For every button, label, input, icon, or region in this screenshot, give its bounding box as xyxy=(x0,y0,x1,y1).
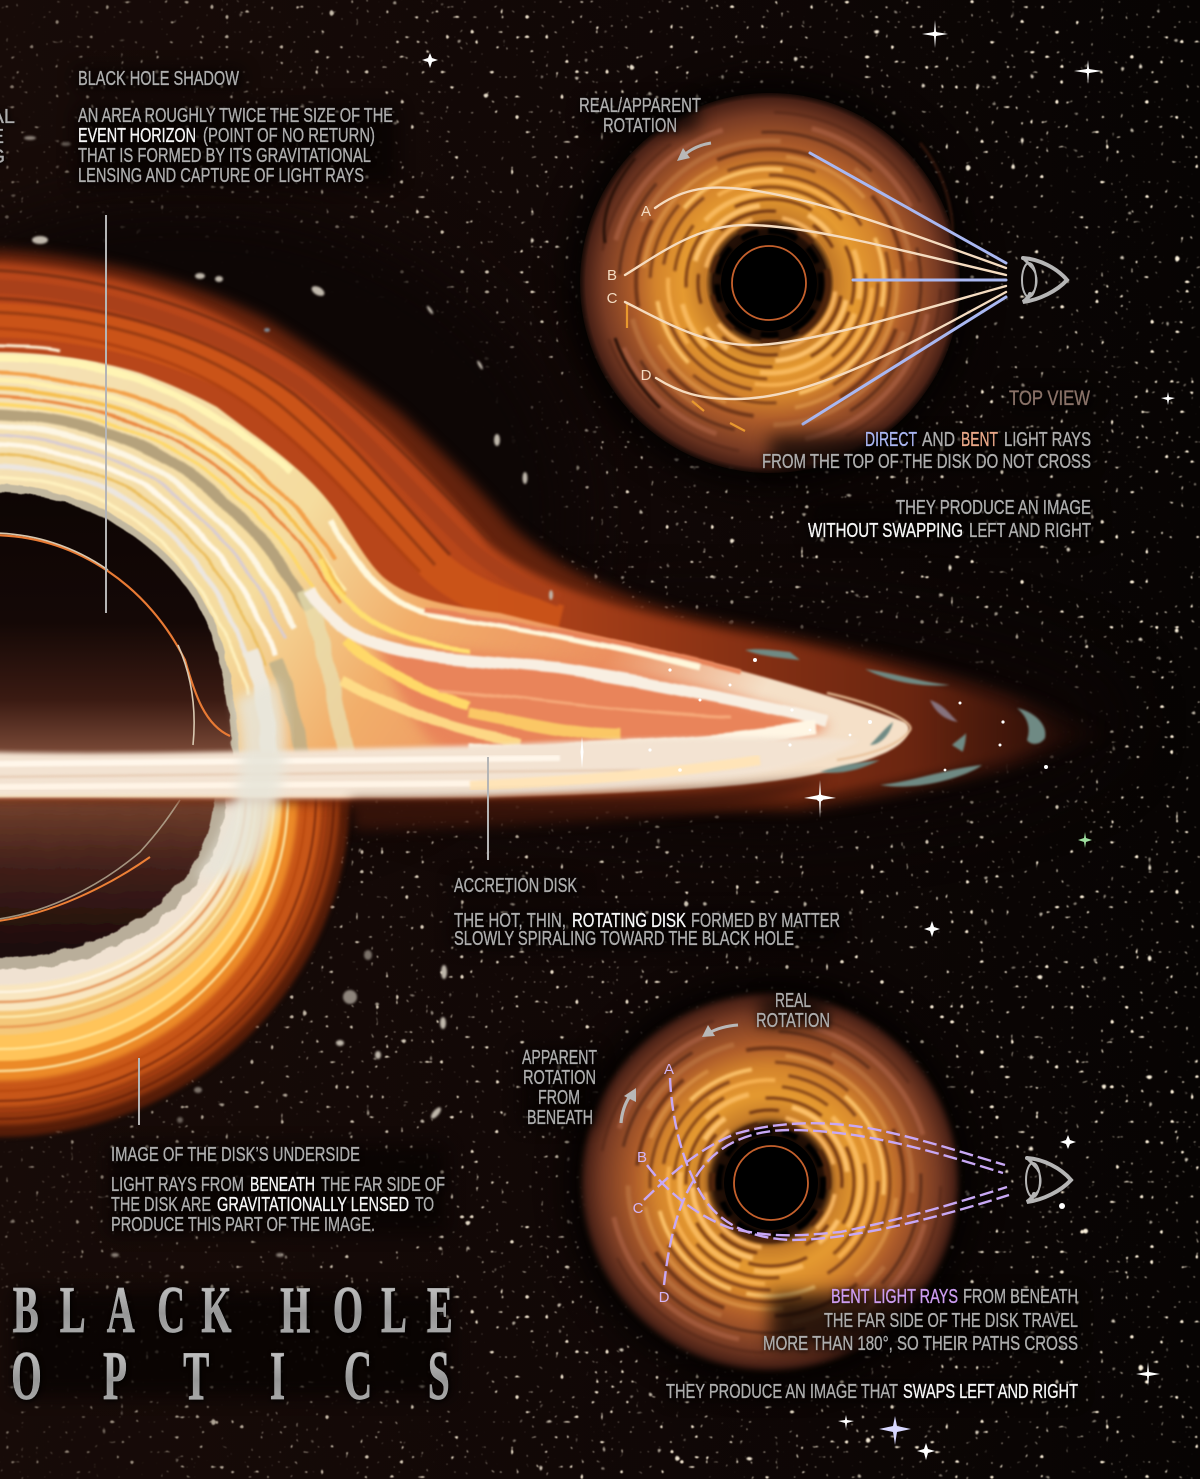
text: disk underside: GRAVITATIONALLY LENSED xyxy=(217,1194,409,1216)
bottom ray labels: D xyxy=(659,1289,670,1306)
text: real/apparent rotation: REAL/APPARENT xyxy=(579,95,701,117)
rotation arrow xyxy=(677,143,711,161)
text: black hole shadow xyxy=(0,68,393,187)
text: apparent rotation from beneath: FROM xyxy=(538,1087,580,1109)
bent light rays xyxy=(625,188,1006,399)
text: apparent rotation from beneath: APPARENT xyxy=(522,1047,597,1069)
bright core shape xyxy=(0,352,909,797)
bottom ray labels: B xyxy=(637,1149,647,1166)
text: black hole shadow: (POINT OF NO RETURN) xyxy=(203,125,375,147)
bright flare stars xyxy=(422,20,1175,1460)
text: top view: THEY PRODUCE AN IMAGE xyxy=(896,497,1091,519)
text: bent light rays xyxy=(666,1286,1078,1403)
lower lensed disk xyxy=(0,453,350,1137)
text: accretion disk: ROTATING DISK xyxy=(572,910,686,932)
text: disk underside xyxy=(111,1144,445,1236)
bottom ray labels: C xyxy=(633,1200,644,1217)
text: top view: FROM THE TOP OF THE DISK DO NOT CROSS xyxy=(762,451,1091,473)
text: apparent rotation from beneath: BENEATH xyxy=(527,1107,593,1129)
top ray labels: D xyxy=(641,367,652,384)
bottom disk body xyxy=(551,963,989,1401)
top ray labels: C xyxy=(607,290,618,307)
apparent rotation arrow xyxy=(621,1088,636,1123)
icon: eye xyxy=(1026,1158,1071,1202)
ring crossing band xyxy=(195,680,285,880)
text: accretion disk: ACCRETION DISK xyxy=(454,875,577,897)
dust streak motes xyxy=(24,136,553,1257)
text: top view: LIGHT RAYS xyxy=(1004,429,1091,451)
icon: eye xyxy=(1022,258,1067,302)
bottom ray labels: A xyxy=(664,1061,674,1078)
teal disk fragments xyxy=(745,649,1045,787)
text: bent light rays: SWAPS LEFT AND RIGHT xyxy=(903,1381,1078,1403)
stars over disk tip xyxy=(580,658,1048,772)
title: OPTICS xyxy=(11,1337,450,1415)
text: top view: LEFT AND RIGHT xyxy=(969,520,1091,542)
photon ring lower xyxy=(0,857,150,922)
text: disk underside: TO xyxy=(415,1194,434,1216)
text: disk underside: PRODUCE THIS PART OF THE IMAGE. xyxy=(111,1214,375,1236)
text: top view: DIRECT xyxy=(865,429,917,451)
text: bent light rays: THE FAR SIDE OF THE DISK TRAVEL xyxy=(824,1310,1078,1332)
upper shadow hole xyxy=(0,490,234,760)
flowing streaks xyxy=(0,346,826,782)
main black hole illustration xyxy=(0,136,1105,1257)
text: top view xyxy=(762,387,1091,542)
text: black hole shadow: LENSING AND CAPTURE OF LIGHT RAYS xyxy=(78,165,364,187)
text: accretion disk: THE HOT, THIN, xyxy=(454,910,566,932)
pointer line: shadow xyxy=(105,215,107,613)
text: disk underside: THE DISK ARE xyxy=(111,1194,211,1216)
top black hole core xyxy=(717,231,821,335)
title xyxy=(11,1272,453,1415)
text: accretion disk: SLOWLY SPIRALING TOWARD THE BLACK HOLE xyxy=(454,928,794,950)
text: top view: WITHOUT SWAPPING xyxy=(808,520,963,542)
upper disk outer orange xyxy=(0,262,1075,797)
upper disk orange gradient streaks xyxy=(0,270,560,622)
text: apparent rotation from beneath: ROTATION xyxy=(523,1067,596,1089)
top view disk diagram xyxy=(551,64,1067,502)
photon ring upper xyxy=(0,535,230,736)
bright edge arc at disk tip xyxy=(827,693,910,760)
horizontal bright band xyxy=(0,738,860,798)
bottom black hole core xyxy=(719,1131,823,1235)
title: BLACKHOLE xyxy=(13,1272,453,1347)
text: real rotation: REAL xyxy=(775,990,811,1012)
text: real/apparent rotation: ROTATION xyxy=(603,115,677,137)
text: apparent rotation from beneath xyxy=(522,1047,597,1129)
shadow rim xyxy=(0,488,236,760)
text: disk underside: THE FAR SIDE OF xyxy=(321,1174,445,1196)
text: bent light rays: MORE THAN 180°, SO THEIR PATHS CROSS xyxy=(763,1333,1078,1355)
bottom ray labels xyxy=(633,1061,674,1306)
text: disk underside: LIGHT RAYS FROM xyxy=(111,1174,244,1196)
lower disk edge shade xyxy=(350,778,830,830)
text: real rotation: ROTATION xyxy=(756,1010,830,1032)
upper disk dim red fringe xyxy=(0,250,1105,810)
pointer line: accretion disk xyxy=(487,757,489,860)
text: top view: TOP VIEW xyxy=(1009,387,1090,410)
top ray labels xyxy=(607,203,652,384)
salmon inner disk xyxy=(375,640,830,779)
bottom view disk diagram xyxy=(551,963,1071,1401)
text: disk underside: IMAGE OF THE DISK’S UNDERSIDE xyxy=(111,1144,360,1166)
text: black hole shadow: THAT IS FORMED BY ITS GRAVITATIONAL xyxy=(78,145,371,167)
pointer line: underside xyxy=(138,1058,140,1125)
text: disk underside: BENEATH xyxy=(250,1174,315,1196)
top disk body xyxy=(551,64,989,502)
text: black hole shadow: AN AREA ROUGHLY TWICE THE SIZE OF THE xyxy=(78,105,393,127)
text: accretion disk: FORMED BY MATTER xyxy=(691,910,840,932)
text: bent light rays: BENT LIGHT RAYS xyxy=(831,1286,958,1308)
text: top view: AND xyxy=(922,429,955,451)
dashed purple light rays xyxy=(644,1078,1009,1285)
real rotation arrow xyxy=(702,1025,738,1037)
text: real/apparent rotation xyxy=(579,95,701,137)
text: bent light rays: FROM BENEATH xyxy=(963,1286,1078,1308)
text: bent light rays: THEY PRODUCE AN IMAGE THAT xyxy=(666,1381,898,1403)
text: accretion disk xyxy=(454,875,840,950)
text: black hole shadow: BLACK HOLE SHADOW xyxy=(78,68,239,90)
text: black hole shadow: EVENT HORIZON xyxy=(78,125,196,147)
text: real rotation xyxy=(756,990,830,1032)
top ray labels: A xyxy=(641,203,651,220)
text: top view: BENT xyxy=(961,429,998,451)
blue direct light rays xyxy=(803,153,1006,424)
top ray labels: B xyxy=(607,267,617,284)
